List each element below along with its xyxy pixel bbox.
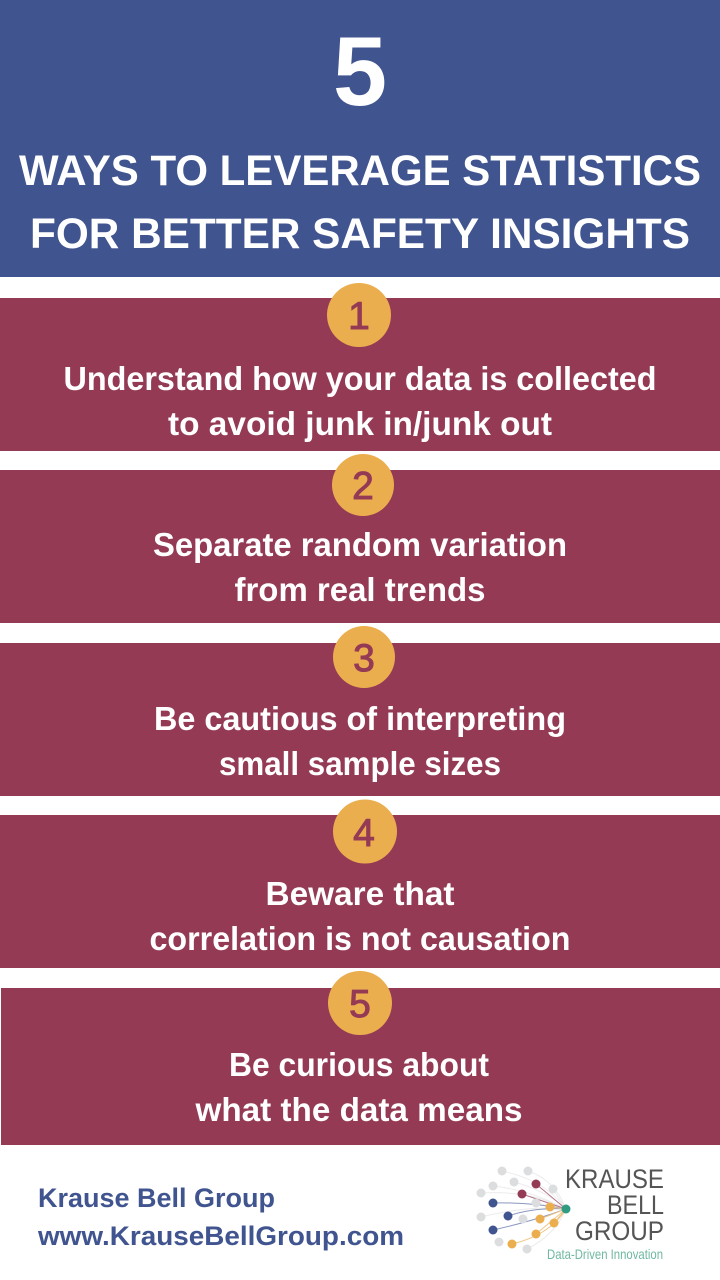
title: FOR BETTER SAFETY INSIGHTS: [30, 210, 690, 258]
icon: network of dots: [476, 1166, 570, 1254]
tip 2 text: [153, 526, 567, 608]
logo wordmark: KRAUSE: [565, 1164, 664, 1194]
badge 2: [332, 454, 394, 516]
tip 4 text: correlation is not causation: [150, 920, 570, 957]
panel: tip 3: [0, 626, 720, 796]
tip 4 text: Beware that: [266, 875, 455, 912]
badge 1: 1: [348, 295, 370, 338]
tip 1 text: Understand how your data is collected: [64, 360, 656, 397]
badge 3: 3: [353, 637, 375, 680]
tip 5 text: Be curious about: [229, 1046, 489, 1083]
logo wordmark: GROUP: [575, 1216, 664, 1246]
panel: tip 2: [0, 454, 720, 623]
title: [19, 147, 701, 258]
tip 5 text: [194, 1046, 522, 1128]
footer contact text: Krause Bell Group: [38, 1183, 275, 1213]
tip 2 text: from real trends: [234, 571, 486, 608]
badge 5: 5: [349, 983, 371, 1026]
badge 1: [327, 283, 391, 347]
badge 4: [333, 800, 397, 864]
footer contact text: [37, 1183, 404, 1251]
panel: tip 5: [1, 971, 720, 1145]
panel: header banner: [0, 0, 720, 277]
badge 2: 2: [352, 465, 374, 508]
tip 3 text: Be cautious of interpreting: [154, 700, 566, 737]
badge 3: [333, 626, 395, 688]
logo: Krause Bell Group: [476, 1164, 664, 1262]
title number: 5: [333, 16, 387, 126]
tip 3 text: [154, 700, 566, 782]
tip 5 text: what the data means: [194, 1091, 522, 1128]
panel: tip 4: [0, 800, 720, 968]
logo wordmark: BELL: [607, 1190, 664, 1220]
footer contact text: www.KrauseBellGroup.com: [37, 1221, 404, 1251]
tip 3 text: small sample sizes: [219, 745, 501, 782]
tip 1 text: to avoid junk in/junk out: [168, 405, 552, 442]
logo tagline: Data-Driven Innovation: [547, 1246, 663, 1262]
logo wordmark: [565, 1164, 664, 1246]
title: WAYS TO LEVERAGE STATISTICS: [19, 147, 701, 195]
badge 5: [328, 971, 392, 1035]
tip 2 text: Separate random variation: [153, 526, 567, 563]
tip 1 text: [64, 360, 656, 442]
tip 4 text: [150, 875, 570, 957]
badge 4: 4: [353, 812, 375, 855]
panel: tip 1: [0, 283, 720, 451]
